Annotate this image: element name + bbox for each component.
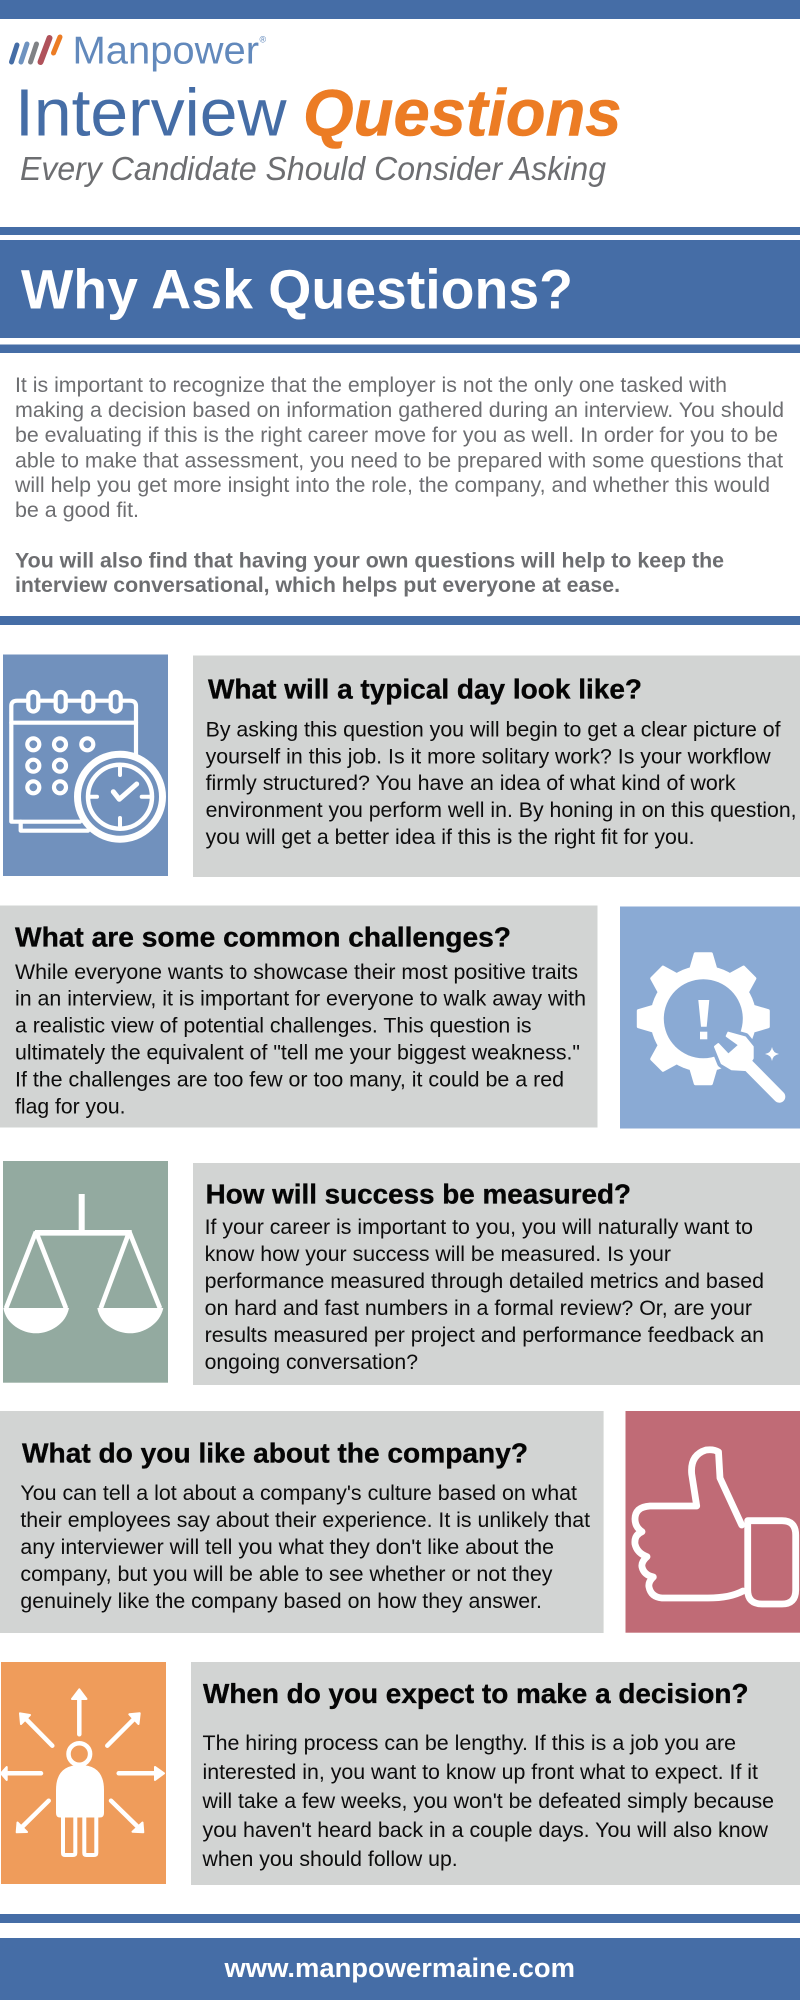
intro paragraph: be evaluating if this is the right career move for you as well. In order for you to be: [15, 424, 778, 447]
heading: When do you expect to make a decision?: [203, 1678, 748, 1709]
panel: typical day: [3, 654, 800, 877]
divider bar: [0, 616, 800, 625]
title: Questions: Questions: [303, 76, 622, 150]
panel: common challenges: [0, 906, 800, 1128]
body text: genuinely like the company based on how they answer.: [20, 1590, 542, 1613]
logo mark: [12, 37, 60, 62]
icon panel: balance scales: [3, 1161, 168, 1383]
icon panel: thumbs up: [626, 1411, 800, 1633]
body text: on hard and fast numbers in a formal review? Or, are your: [205, 1297, 752, 1320]
body text: [15, 961, 586, 1118]
body text: in an interview, it is important for everyone to walk away with: [15, 988, 586, 1011]
body text: While everyone wants to showcase their most positive traits: [15, 961, 578, 984]
body text: If the challenges are too few or too many, it could be a red: [15, 1069, 564, 1092]
logo: Manpower: [12, 29, 266, 72]
panel: decision timing: [1, 1662, 800, 1885]
body text: you will get a better idea if this is the right fit for you.: [206, 826, 695, 849]
body text: [206, 718, 797, 849]
body text: yourself in this job. Is it more solitary work? Is your workflow: [206, 745, 771, 768]
body text: [201, 1732, 774, 1871]
title: [15, 76, 622, 150]
bottom divider bar: [0, 1914, 800, 1923]
text panel: [191, 1662, 800, 1885]
intro paragraph: be a good fit.: [15, 499, 139, 522]
body text: You can tell a lot about a company's culture based on what: [20, 1482, 577, 1505]
body text: The hiring process can be lengthy. If this is a job you are: [202, 1732, 736, 1755]
intro paragraph: able to make that assessment, you need to be prepared with some questions that: [15, 450, 783, 472]
heading: What are some common challenges?: [15, 921, 511, 952]
panel: like about the company: [0, 1411, 800, 1633]
body text: their employees say about their experience. It is unlikely that: [20, 1509, 590, 1532]
body text: will take a few weeks, you won't be defeated simply because: [201, 1790, 774, 1813]
banner heading: Why Ask Questions?: [21, 258, 573, 320]
top bar: [0, 0, 800, 19]
body text: [20, 1482, 590, 1613]
intro paragraph: will help you get more insight into the role, the company, and whether this would: [14, 474, 770, 497]
subtitle: Every Candidate Should Consider Asking: [20, 150, 607, 187]
body text: If your career is important to you, you will naturally want to: [205, 1216, 753, 1239]
body text: any interviewer will tell you what they don't like about the: [20, 1536, 554, 1559]
body text: results measured per project and performance feedback an: [205, 1324, 764, 1347]
text panel: [193, 656, 800, 877]
icon panel: person with radiating arrows: [1, 1662, 166, 1884]
body text: performance measured through detailed metrics and based: [205, 1270, 764, 1293]
panel: success measured: [3, 1161, 800, 1385]
icon panel: gear with wrench: [620, 906, 800, 1128]
title: Interview: Interview: [15, 76, 287, 150]
text panel: [0, 906, 598, 1128]
body text: environment you perform well in. By honing in on this question,: [206, 799, 797, 822]
intro paragraph: It is important to recognize that the employer is not the only one tasked with: [15, 374, 727, 397]
intro paragraph: [14, 374, 784, 597]
body text: interested in, you want to know up front what to expect. If it: [202, 1761, 758, 1784]
intro paragraph: interview conversational, which helps put everyone at ease.: [15, 574, 620, 597]
body text: firmly structured? You have an idea of what kind of work: [206, 772, 736, 795]
icon panel: calendar and clock: [3, 654, 168, 876]
section banner: Why Ask Questions: [0, 227, 800, 353]
logo wordmark: Manpower: [72, 29, 259, 72]
heading: What do you like about the company?: [22, 1438, 528, 1469]
heading: How will success be measured?: [206, 1178, 631, 1209]
intro paragraph: You will also find that having your own questions will help to keep the: [15, 550, 724, 572]
body text: [205, 1216, 764, 1374]
body text: a realistic view of potential challenges. This question is: [15, 1014, 532, 1038]
body text: By asking this question you will begin to get a clear picture of: [206, 718, 781, 741]
body text: ultimately the equivalent of "tell me your biggest weakness.": [15, 1042, 580, 1065]
body text: when you should follow up.: [201, 1848, 458, 1871]
footer: [0, 1938, 800, 2000]
body text: you haven't heard back in a couple days. You will also know: [202, 1819, 769, 1842]
heading: What will a typical day look like?: [208, 674, 642, 704]
text panel: [0, 1411, 604, 1633]
body text: company, but you will be able to see whether or not they: [20, 1563, 553, 1586]
text panel: [193, 1163, 800, 1385]
registered mark: ®: [260, 34, 266, 44]
body text: ongoing conversation?: [205, 1351, 418, 1374]
body text: know how your success will be measured. Is your: [205, 1243, 671, 1266]
website URL: www.manpowermaine.com: [223, 1953, 575, 1983]
body text: flag for you.: [15, 1096, 126, 1118]
intro paragraph: making a decision based on information gathered during an interview. You should: [15, 399, 784, 422]
